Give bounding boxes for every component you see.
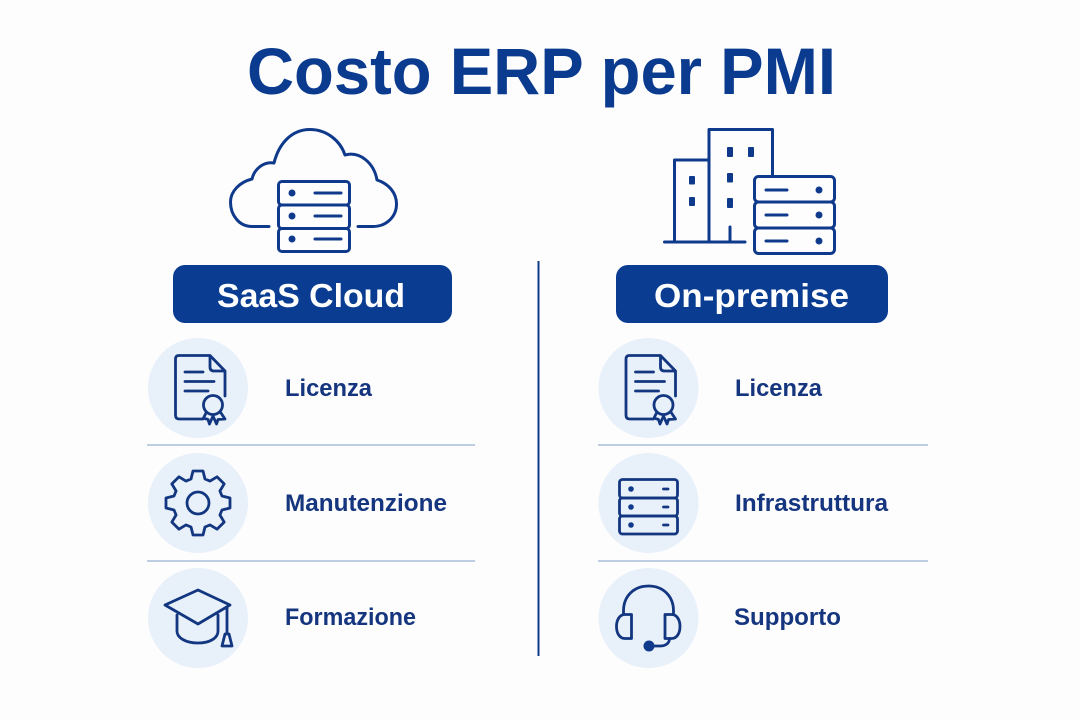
panel: On-premise (598, 130, 928, 668)
badge: SaaS Cloud (173, 265, 452, 323)
row: Licenza (598, 338, 822, 438)
row: Licenza: Licenza (285, 375, 372, 402)
row: Infrastruttura: Infrastruttura (735, 490, 888, 517)
row: Licenza: Licenza (735, 375, 822, 402)
icon: cloud with server (230, 130, 396, 252)
row: Supporto: Supporto (734, 604, 841, 631)
row: Supporto (598, 568, 841, 668)
badge: SaaS Cloud: SaaS Cloud (217, 277, 405, 314)
column divider (538, 261, 540, 656)
row: Manutenzione: Manutenzione (285, 490, 447, 517)
row: Formazione (148, 568, 416, 668)
row: Formazione: Formazione (285, 604, 416, 631)
row: Infrastruttura (598, 453, 888, 553)
panel: SaaS Cloud (147, 130, 475, 668)
title: Costo ERP per PMI (247, 34, 836, 108)
badge: On-premise (616, 265, 888, 323)
icon: buildings with server (664, 130, 834, 254)
row: Licenza (148, 338, 372, 438)
badge: On-premise: On-premise (654, 277, 849, 314)
row: Manutenzione (148, 453, 447, 553)
